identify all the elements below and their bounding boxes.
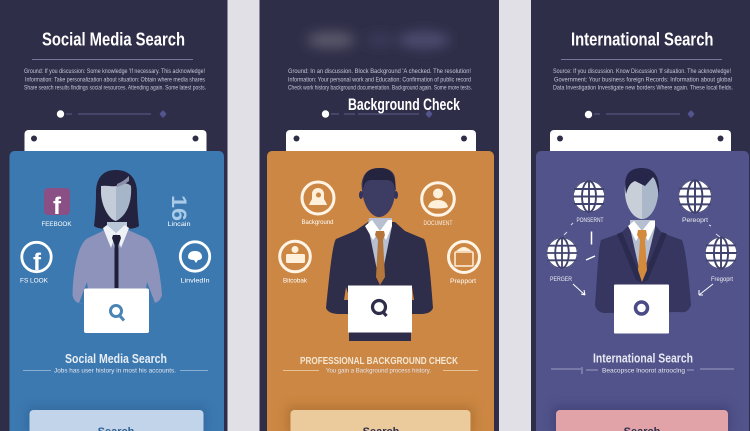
panel: background check (260, 0, 499, 431)
button: search (556, 410, 728, 431)
overlay heading: background check: Background Check (348, 96, 461, 114)
icon: search ring (636, 302, 648, 314)
label: pereoprt: Pereoprt (682, 218, 708, 224)
label: document: DOCUMENT (424, 221, 453, 227)
card: blue (10, 151, 224, 431)
icon: facebook circle: f (33, 249, 42, 276)
slider (585, 110, 694, 118)
label: background: Background (302, 220, 334, 226)
card: purple (536, 151, 749, 431)
icon: globe 2 (678, 180, 712, 213)
card title: International Search (593, 350, 693, 366)
icon: globe 1 (573, 180, 605, 212)
description text (553, 69, 733, 92)
laptop (348, 286, 412, 341)
icon: facebook circle (22, 242, 51, 276)
heading: social media search: Social Media Search (42, 30, 185, 50)
icon: facebook square: f (53, 193, 62, 220)
button: search (30, 410, 204, 431)
description text: Government: Your business foreign Records: Information about global (554, 78, 732, 84)
icon: globe 3 (546, 237, 578, 269)
button: search (290, 410, 470, 431)
description text: Data Investigation Investigate new borders Where again. These local fields. (553, 86, 733, 92)
description text: Source: If you discussion. Know Discussion 'If situation. The acknowledge! (553, 69, 731, 75)
description text: Information: Take personalization about situation: Obtain where media shares (25, 78, 205, 84)
icon: magnifier (372, 300, 386, 316)
heading: international search: International Search (571, 30, 714, 50)
button shadow (26, 406, 207, 431)
tab (550, 130, 731, 160)
label: linkedin: LinvledIn (180, 278, 210, 284)
icon: globe 4 (705, 237, 737, 269)
panel: international search (531, 0, 750, 431)
label: bitcobak: Bitcobak (283, 278, 308, 284)
description text: Share search results findings social resources. Attending again. Some latest posts. (24, 86, 206, 92)
connector strokes (564, 223, 720, 260)
person: man dark (326, 168, 433, 314)
button shadow (553, 406, 730, 431)
label: perger: PERGER (550, 277, 573, 283)
icon: facebook square (44, 188, 70, 220)
person: woman (72, 170, 162, 303)
card title: PROFESSIONAL BACKGROUND CHECK (300, 355, 458, 367)
tab (286, 130, 476, 160)
arrow: right (699, 284, 713, 295)
icon: speech bubble circle (180, 242, 210, 271)
laptop (84, 288, 149, 333)
icon: clock person (302, 182, 334, 214)
tab (24, 130, 206, 160)
label: fregoprt: Fregoprt (711, 277, 733, 283)
label: fs look: FS LOOK (20, 278, 48, 284)
laptop (614, 284, 669, 334)
icon: passport (448, 242, 480, 272)
card title: Social Media Search (65, 351, 167, 366)
icon: rotated glyph: 16 (167, 195, 190, 221)
description text: Check work history background documentation. Background again. Some more tests. (288, 86, 472, 92)
card subtext: Beacopsce lnoorot atrooclng (602, 368, 685, 374)
card: orange (267, 151, 494, 431)
icon: user (422, 183, 454, 215)
label: feebook: FEEBOOK (42, 222, 72, 228)
panel: social media search (0, 0, 228, 431)
icon: id card (280, 241, 310, 272)
card subtext: Jobs has user history in most his accounts. (54, 368, 176, 374)
button shadow (287, 406, 474, 431)
card subtext (551, 367, 734, 374)
icon: magnifier (110, 306, 124, 320)
description text (24, 69, 206, 92)
card subtext: You gain a Background process history. (326, 368, 431, 374)
description text (288, 69, 472, 92)
description text: Ground: If you discussion: Some knowledge 'If necessary. This acknowledge! (24, 69, 205, 75)
label: lincain: Lincain (168, 222, 190, 228)
blurred heading (307, 32, 450, 48)
label: ponsernt: PONSERNT (576, 218, 604, 224)
slider (57, 110, 166, 118)
description text: Information: Your personal work and Education: Confirmation of public record (288, 78, 471, 84)
person: man suit (595, 168, 691, 313)
arrow: left (573, 284, 585, 295)
slider (322, 110, 432, 118)
description text: Ground: In an discussion. Block Background 'A checked. The resolution! (288, 69, 471, 75)
label: prepport: Prepport (450, 279, 476, 285)
